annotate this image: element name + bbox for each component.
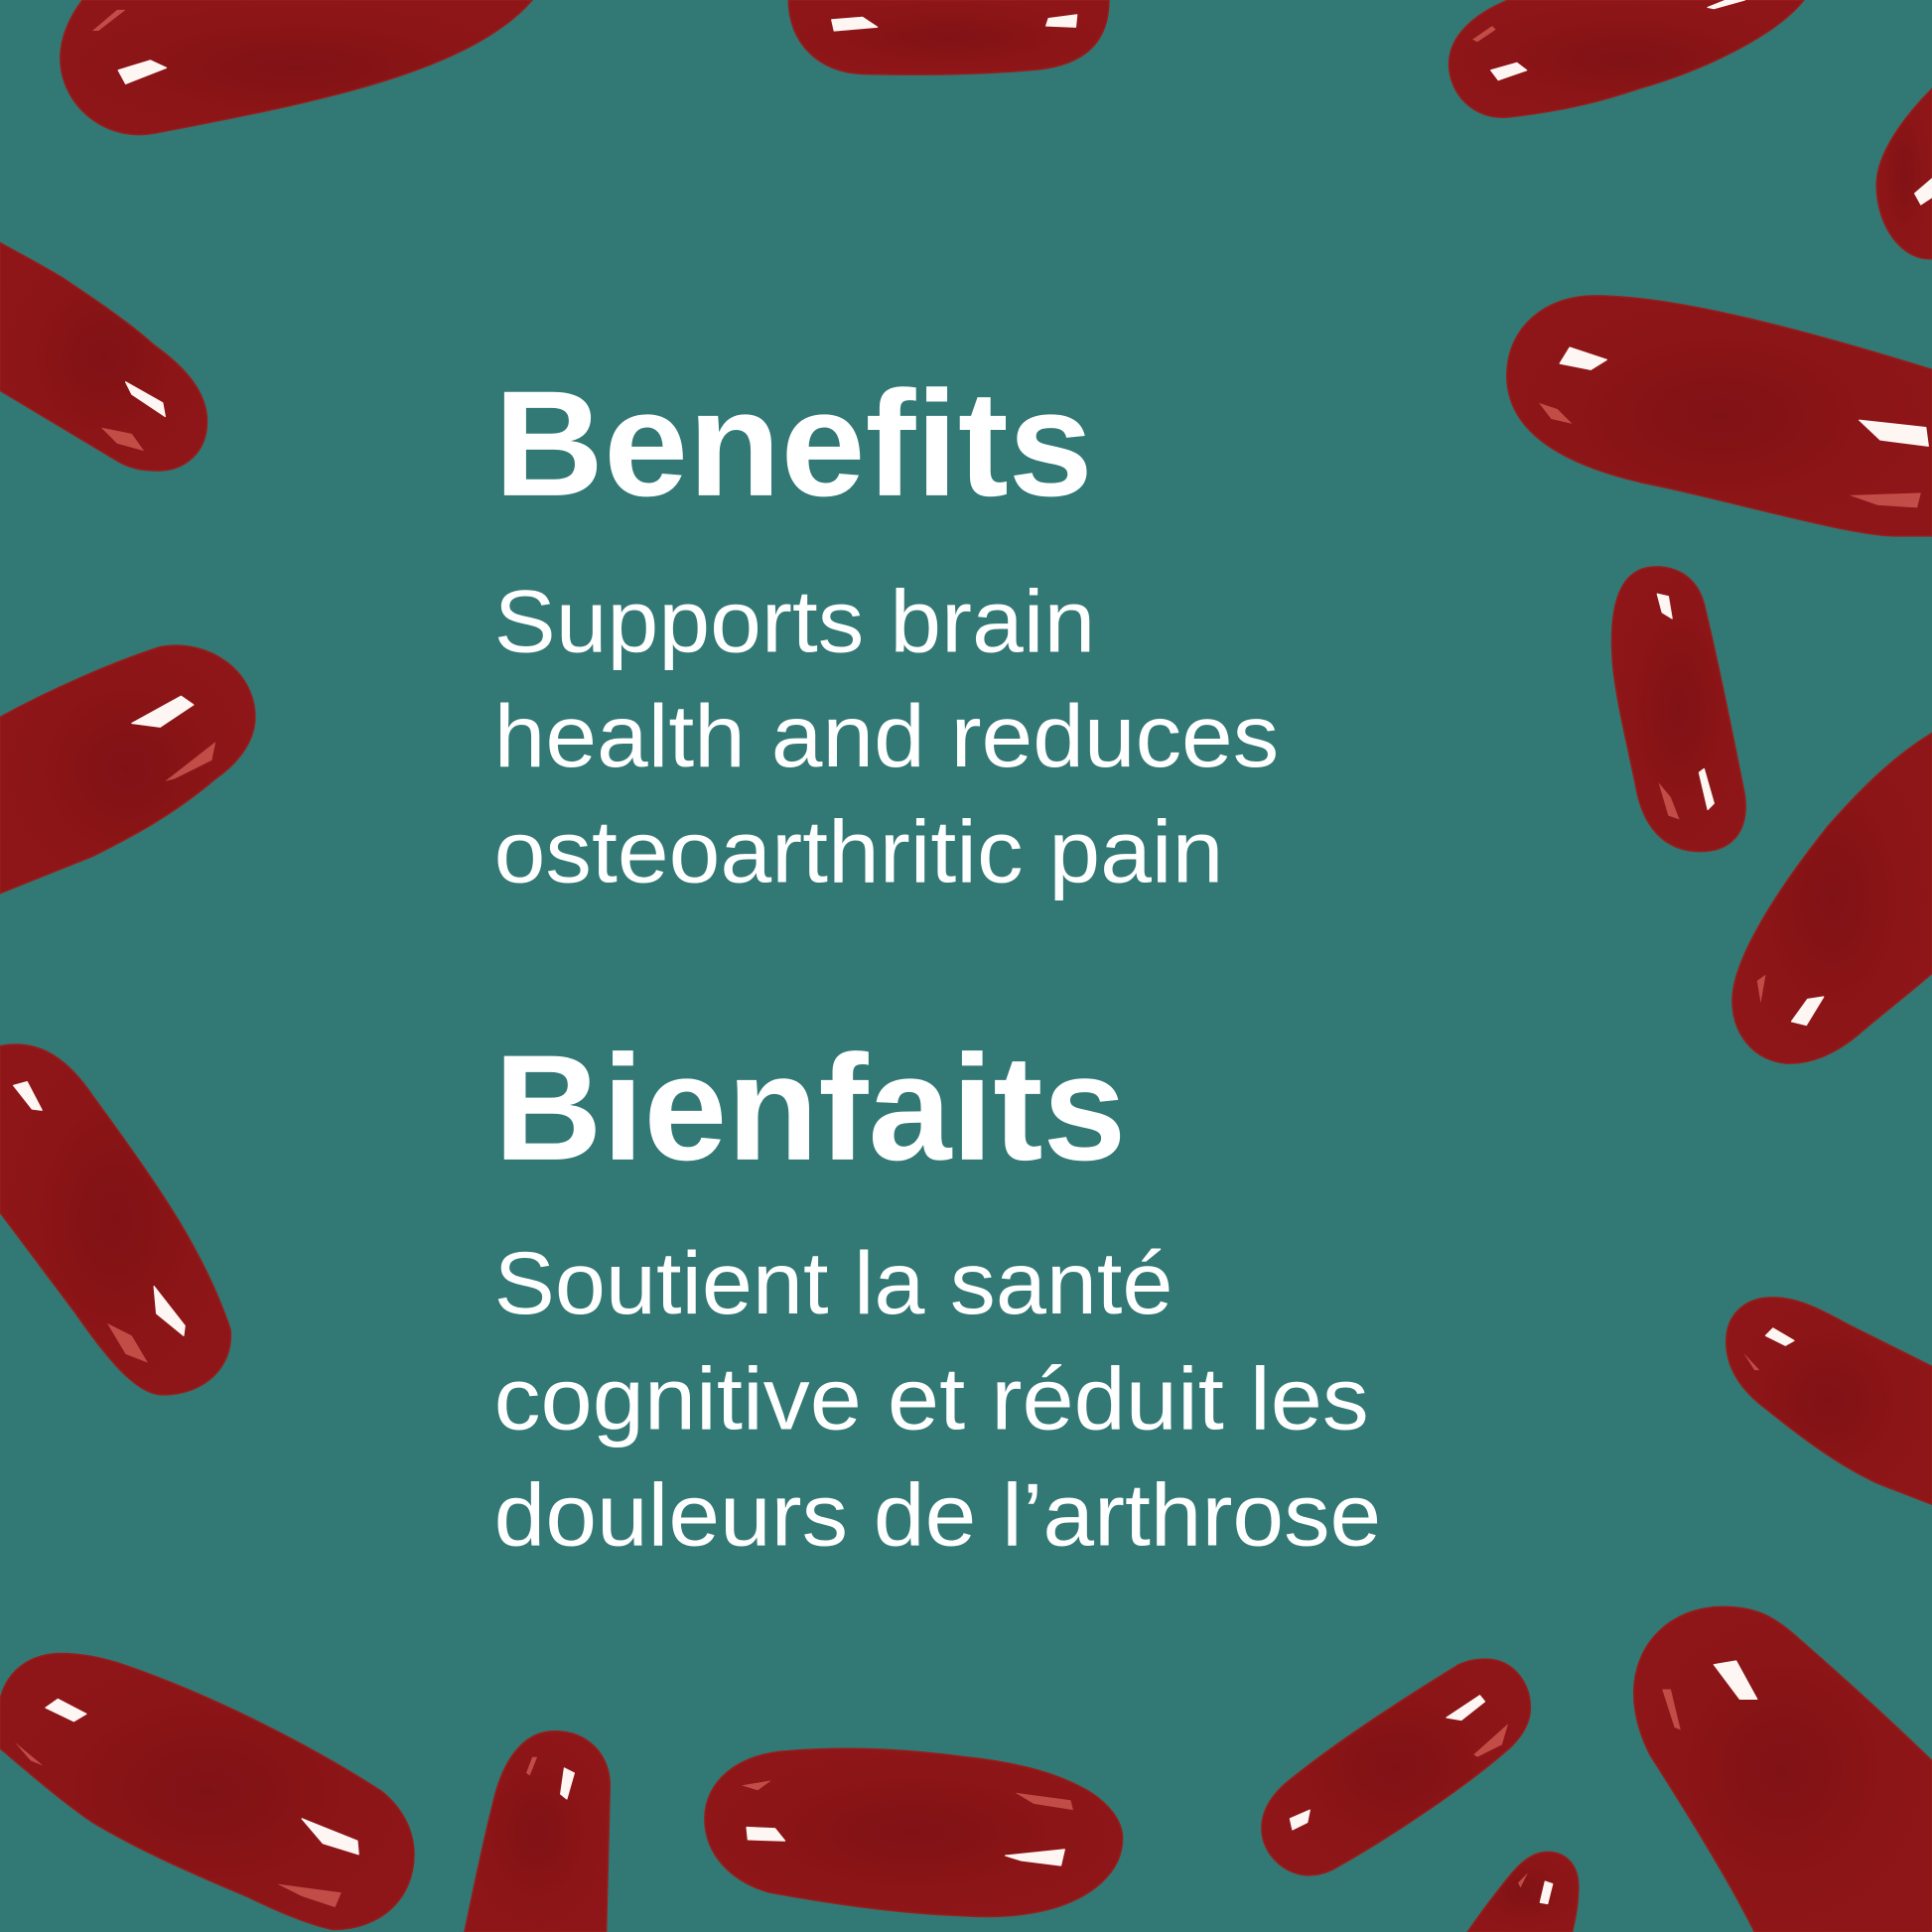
capsule: top right <box>1449 0 1804 117</box>
text block: French benefits: douleurs de l’arthrose <box>494 1464 1381 1564</box>
capsule: diagonal bottom <box>1262 1659 1530 1875</box>
text block: French benefits: Soutient la santé <box>494 1233 1173 1332</box>
capsule: small vertical right <box>1612 567 1745 852</box>
capsule: small bottom left <box>465 1731 610 1932</box>
text block: English benefits: Supports brain <box>494 572 1095 671</box>
heading: Benefits: Benefits <box>494 360 1093 528</box>
capsule: top left <box>61 0 532 135</box>
capsule: top center <box>788 0 1109 74</box>
capsule: large right <box>1507 296 1932 536</box>
capsule: bottom left <box>0 1654 414 1930</box>
capsule: bottom center <box>705 1748 1123 1916</box>
capsule: small bottom right <box>1467 1852 1579 1932</box>
text block: English benefits: health and reduces <box>494 686 1279 785</box>
heading: Bienfaits: Bienfaits <box>494 1025 1126 1192</box>
text block: English benefits: osteoarthritic pain <box>494 802 1223 901</box>
capsule: right lower <box>1726 1298 1932 1504</box>
capsule: large bottom right <box>1634 1606 1932 1932</box>
capsule: left lower <box>0 1044 230 1395</box>
capsule: left upper <box>0 242 207 471</box>
capsule: left middle <box>0 645 255 894</box>
capsule: right middle <box>1732 733 1932 1063</box>
text block: French benefits <box>494 1233 1381 1564</box>
capsule: right edge top <box>1876 88 1932 259</box>
text block: English benefits <box>494 572 1279 901</box>
text block: French benefits: cognitive et réduit les <box>494 1349 1369 1449</box>
